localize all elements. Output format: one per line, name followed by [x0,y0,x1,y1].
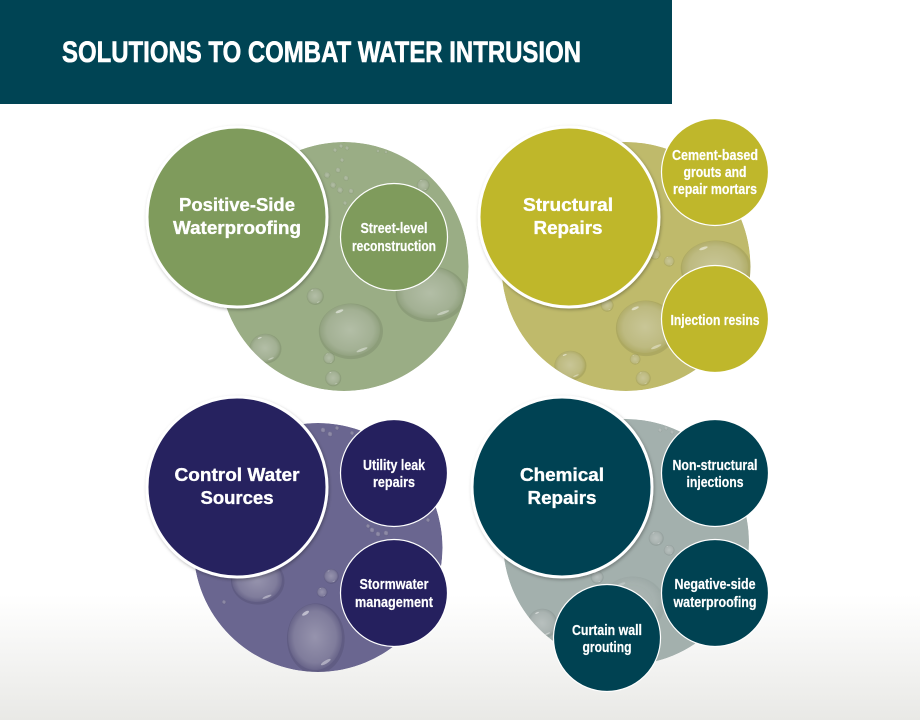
sub circle: curtain wall grouting: grouting [582,640,632,656]
panel: structural repairs [479,118,768,391]
title banner [0,0,672,104]
background floor gradient [0,595,920,720]
sub circle: injection resins: Injection resins [670,313,760,329]
main circle: positive-side waterproofing [147,127,327,307]
sub circle: negative-side waterproofing: waterproofing [673,595,756,611]
sub circle: non-structural injections [662,420,768,526]
main circle: positive-side waterproofing: Waterproofing [173,218,301,238]
water droplet background: green [220,142,468,391]
sub circle: negative-side waterproofing [662,540,768,646]
sub circle: street-level reconstruction: reconstruction [352,239,436,255]
sub circle: non-structural injections: Non-structural [672,458,758,474]
main circle: chemical repairs: Chemical [520,465,604,485]
main circle: structural repairs: Structural [523,195,613,215]
sub circle: cement-based grouts and repair mortars: grouts and [684,165,746,181]
sub circle: non-structural injections: injections [686,475,744,491]
main circle: control water sources: Sources [200,488,274,508]
water droplet background: indigo [194,423,442,674]
main circle: chemical repairs [472,397,652,577]
sub circle: cement-based grouts and repair mortars [662,118,768,226]
panel: positive-side waterproofing [147,127,468,391]
title: SOLUTIONS TO COMBAT WATER INTRUSION [62,36,581,69]
sub circle: cement-based grouts and repair mortars: Cement-based [672,148,758,164]
sub circle: utility leak repairs: Utility leak [363,458,426,474]
main circle: positive-side waterproofing: Positive-Side [179,195,295,215]
sub circle: stormwater management: management [355,595,433,611]
sub circle: utility leak repairs: repairs [373,475,415,491]
sub circle: stormwater management: Stormwater [360,577,429,593]
water droplet background: grey-teal [503,419,749,665]
sub circle: street-level reconstruction [340,184,448,290]
sub circle: negative-side waterproofing: Negative-side [674,577,756,593]
main circle: control water sources [147,397,327,577]
sub circle: stormwater management [340,540,448,646]
panel: control water sources [147,397,448,674]
panel: chemical repairs [472,397,768,692]
sub circle: cement-based grouts and repair mortars: repair mortars [673,182,757,198]
sub circle: utility leak repairs [340,420,448,526]
main circle: control water sources: Control Water [174,465,300,485]
sub circle: curtain wall grouting: Curtain wall [572,623,642,639]
sub circle: curtain wall grouting [554,584,660,692]
main circle: chemical repairs: Repairs [528,488,596,508]
water droplet background: olive [502,142,751,391]
sub circle: street-level reconstruction: Street-level [360,221,428,237]
sub circle: injection resins [662,266,768,372]
main circle: structural repairs [479,127,659,307]
main circle: structural repairs: Repairs [534,218,602,238]
